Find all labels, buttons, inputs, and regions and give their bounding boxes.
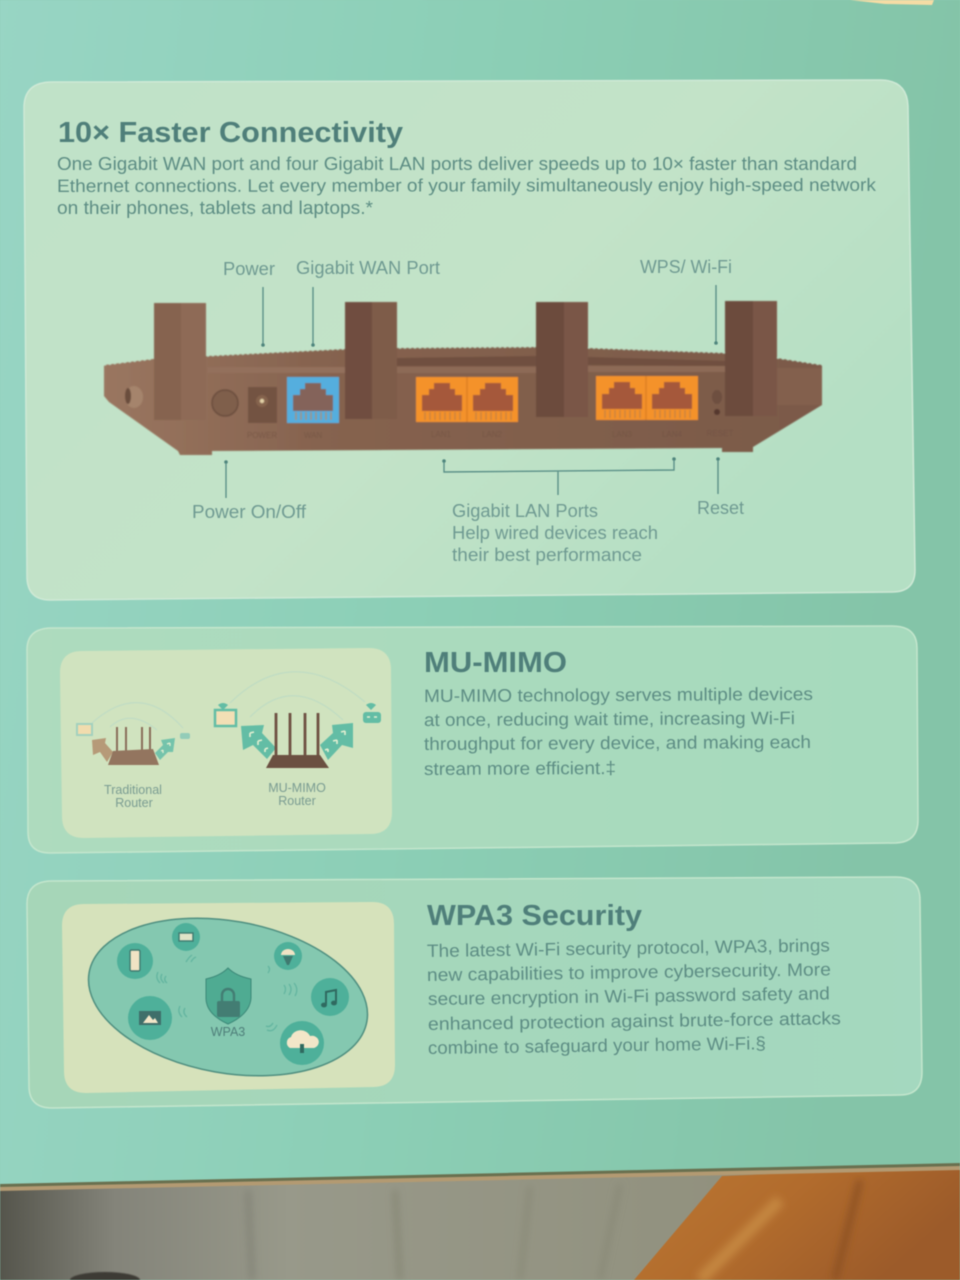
text block: WPA3 description: combine to safeguard your home Wi-Fi.§ <box>428 1033 766 1058</box>
text block: MU-MIMO description: stream more efficient.‡ <box>424 758 616 779</box>
MU-MIMO router: TV icon <box>215 703 236 726</box>
MU-MIMO router: left arrow <box>241 725 276 759</box>
port silk labels: POWER <box>247 431 277 440</box>
WAN port: blue <box>287 377 339 423</box>
inset: MU-MIMO diagram <box>60 648 392 838</box>
power socket <box>248 387 277 423</box>
label: Gigabit LAN Ports: Gigabit LAN Ports <box>452 501 598 521</box>
port silk labels: WAN <box>304 431 322 440</box>
caption: Traditional Router <box>104 783 162 810</box>
text block: MU-MIMO description: throughput for every device, and making each <box>424 732 811 754</box>
text block: WPA3 description: secure encryption in Wi-Fi password safety and <box>428 983 830 1009</box>
caption: Traditional Router: Router <box>115 796 153 810</box>
port silk labels: LAN3 <box>612 430 633 439</box>
MU-MIMO router icon <box>266 713 329 768</box>
scene below the box: fabric and wood <box>0 1166 960 1280</box>
network ellipse <box>76 898 380 1096</box>
traditional router: tan arrow <box>92 738 113 762</box>
label: WPS/ Wi-Fi: WPS/ Wi-Fi <box>640 257 732 277</box>
text block: WPA3 description <box>427 935 841 1058</box>
port silk labels: LAN4 <box>662 430 683 439</box>
arrow: WAN pointer <box>311 287 315 347</box>
text block: MU-MIMO description <box>424 684 813 779</box>
arrow: power on/off pointer <box>224 460 228 498</box>
label: Gigabit LAN Ports <box>452 501 658 565</box>
icon: phone <box>117 943 153 979</box>
top corner paper <box>850 0 934 5</box>
label: Power: Power <box>223 259 275 279</box>
antenna 3 <box>536 302 588 417</box>
top ridge shading <box>207 356 822 405</box>
text block: gigabit port description: on their phones, tablets and laptops.* <box>57 198 373 218</box>
top serrated edge <box>104 347 822 365</box>
MU-MIMO router: gamepad icon <box>363 703 381 723</box>
traditional router icon <box>108 727 159 765</box>
wi-fi signal waves <box>157 955 297 1031</box>
text block: WPA3 description: enhanced protection against brute-force attacks <box>428 1008 841 1034</box>
router body <box>104 347 822 455</box>
side knob <box>125 386 143 408</box>
inset: WPA3 diagram <box>62 898 395 1096</box>
panel: WPA3 Security <box>27 877 922 1108</box>
label: WPA3: WPA3 <box>211 1025 245 1039</box>
label: Reset: Reset <box>697 498 744 518</box>
label: Gigabit WAN Port: Gigabit WAN Port <box>296 258 440 278</box>
panel: MU-MIMO <box>27 626 918 853</box>
box edge: corrugated cardboard <box>0 1163 960 1191</box>
MU-MIMO router: signal arcs <box>230 672 365 720</box>
port silk labels: RESET <box>707 429 733 438</box>
LAN ports 1 and 2: orange <box>416 377 518 422</box>
traditional router: laptop icon <box>77 724 92 735</box>
port silk labels: LAN2 <box>482 430 503 439</box>
arrow: WPS pointer <box>714 285 718 345</box>
antenna 1 <box>154 303 206 420</box>
port silk labels: LAN1 <box>431 430 452 439</box>
caption: MU-MIMO Router <box>268 781 326 808</box>
heading: MU-MIMO: MU-MIMO <box>424 647 567 679</box>
icon: bulb <box>274 942 302 970</box>
label: Power On/Off: Power On/Off <box>192 502 307 522</box>
MU-MIMO router: right arrow <box>320 723 353 760</box>
traditional router: signal arcs <box>92 703 183 730</box>
heading: 10× Faster Connectivity: 10× Faster Connectivity <box>58 117 403 149</box>
port silk labels <box>247 429 733 440</box>
caption: Traditional Router: Traditional <box>104 783 162 797</box>
text block: gigabit port description: Ethernet connections. Let every member of your family simultaneously enjoy high-speed network <box>57 175 877 196</box>
heading: WPA3 Security: WPA3 Security <box>427 900 642 932</box>
WPS and reset buttons <box>712 390 722 415</box>
shield with padlock <box>206 968 251 1024</box>
antenna 4 <box>725 301 777 416</box>
caption: MU-MIMO Router: MU-MIMO <box>268 781 326 795</box>
text block: MU-MIMO description: at once, reducing wait time, increasing Wi-Fi <box>424 708 795 730</box>
arrow: power pointer <box>261 287 265 347</box>
bracket: LAN ports <box>442 457 676 495</box>
icon: image <box>128 996 172 1040</box>
icon: card <box>172 923 200 951</box>
LAN ports 3 and 4: orange <box>596 376 698 420</box>
label: Gigabit LAN Ports: their best performance <box>452 545 642 565</box>
label: Gigabit LAN Ports: Help wired devices reach <box>452 523 658 543</box>
traditional router: teal arrow <box>155 738 175 760</box>
text block: WPA3 description: new capabilities to improve cybersecurity. More <box>427 959 831 985</box>
caption: MU-MIMO Router: Router <box>278 794 316 808</box>
icon: cloud download <box>280 1021 324 1065</box>
text block: gigabit port description <box>57 154 877 218</box>
antenna 2 <box>345 302 397 419</box>
router rear view <box>104 301 822 455</box>
text block: gigabit port description: One Gigabit WAN port and four Gigabit LAN ports deliver speeds up to 10× faster than standard <box>57 154 857 174</box>
power button <box>212 390 238 416</box>
arrow: reset pointer <box>716 457 720 494</box>
text block: WPA3 description: The latest Wi-Fi security protocol, WPA3, brings <box>427 935 830 961</box>
traditional router: gamepad icon <box>180 733 190 739</box>
icon: music note <box>311 978 349 1016</box>
panel: 10× Faster Connectivity <box>24 80 915 600</box>
text block: MU-MIMO description: MU-MIMO technology serves multiple devices <box>424 684 813 706</box>
